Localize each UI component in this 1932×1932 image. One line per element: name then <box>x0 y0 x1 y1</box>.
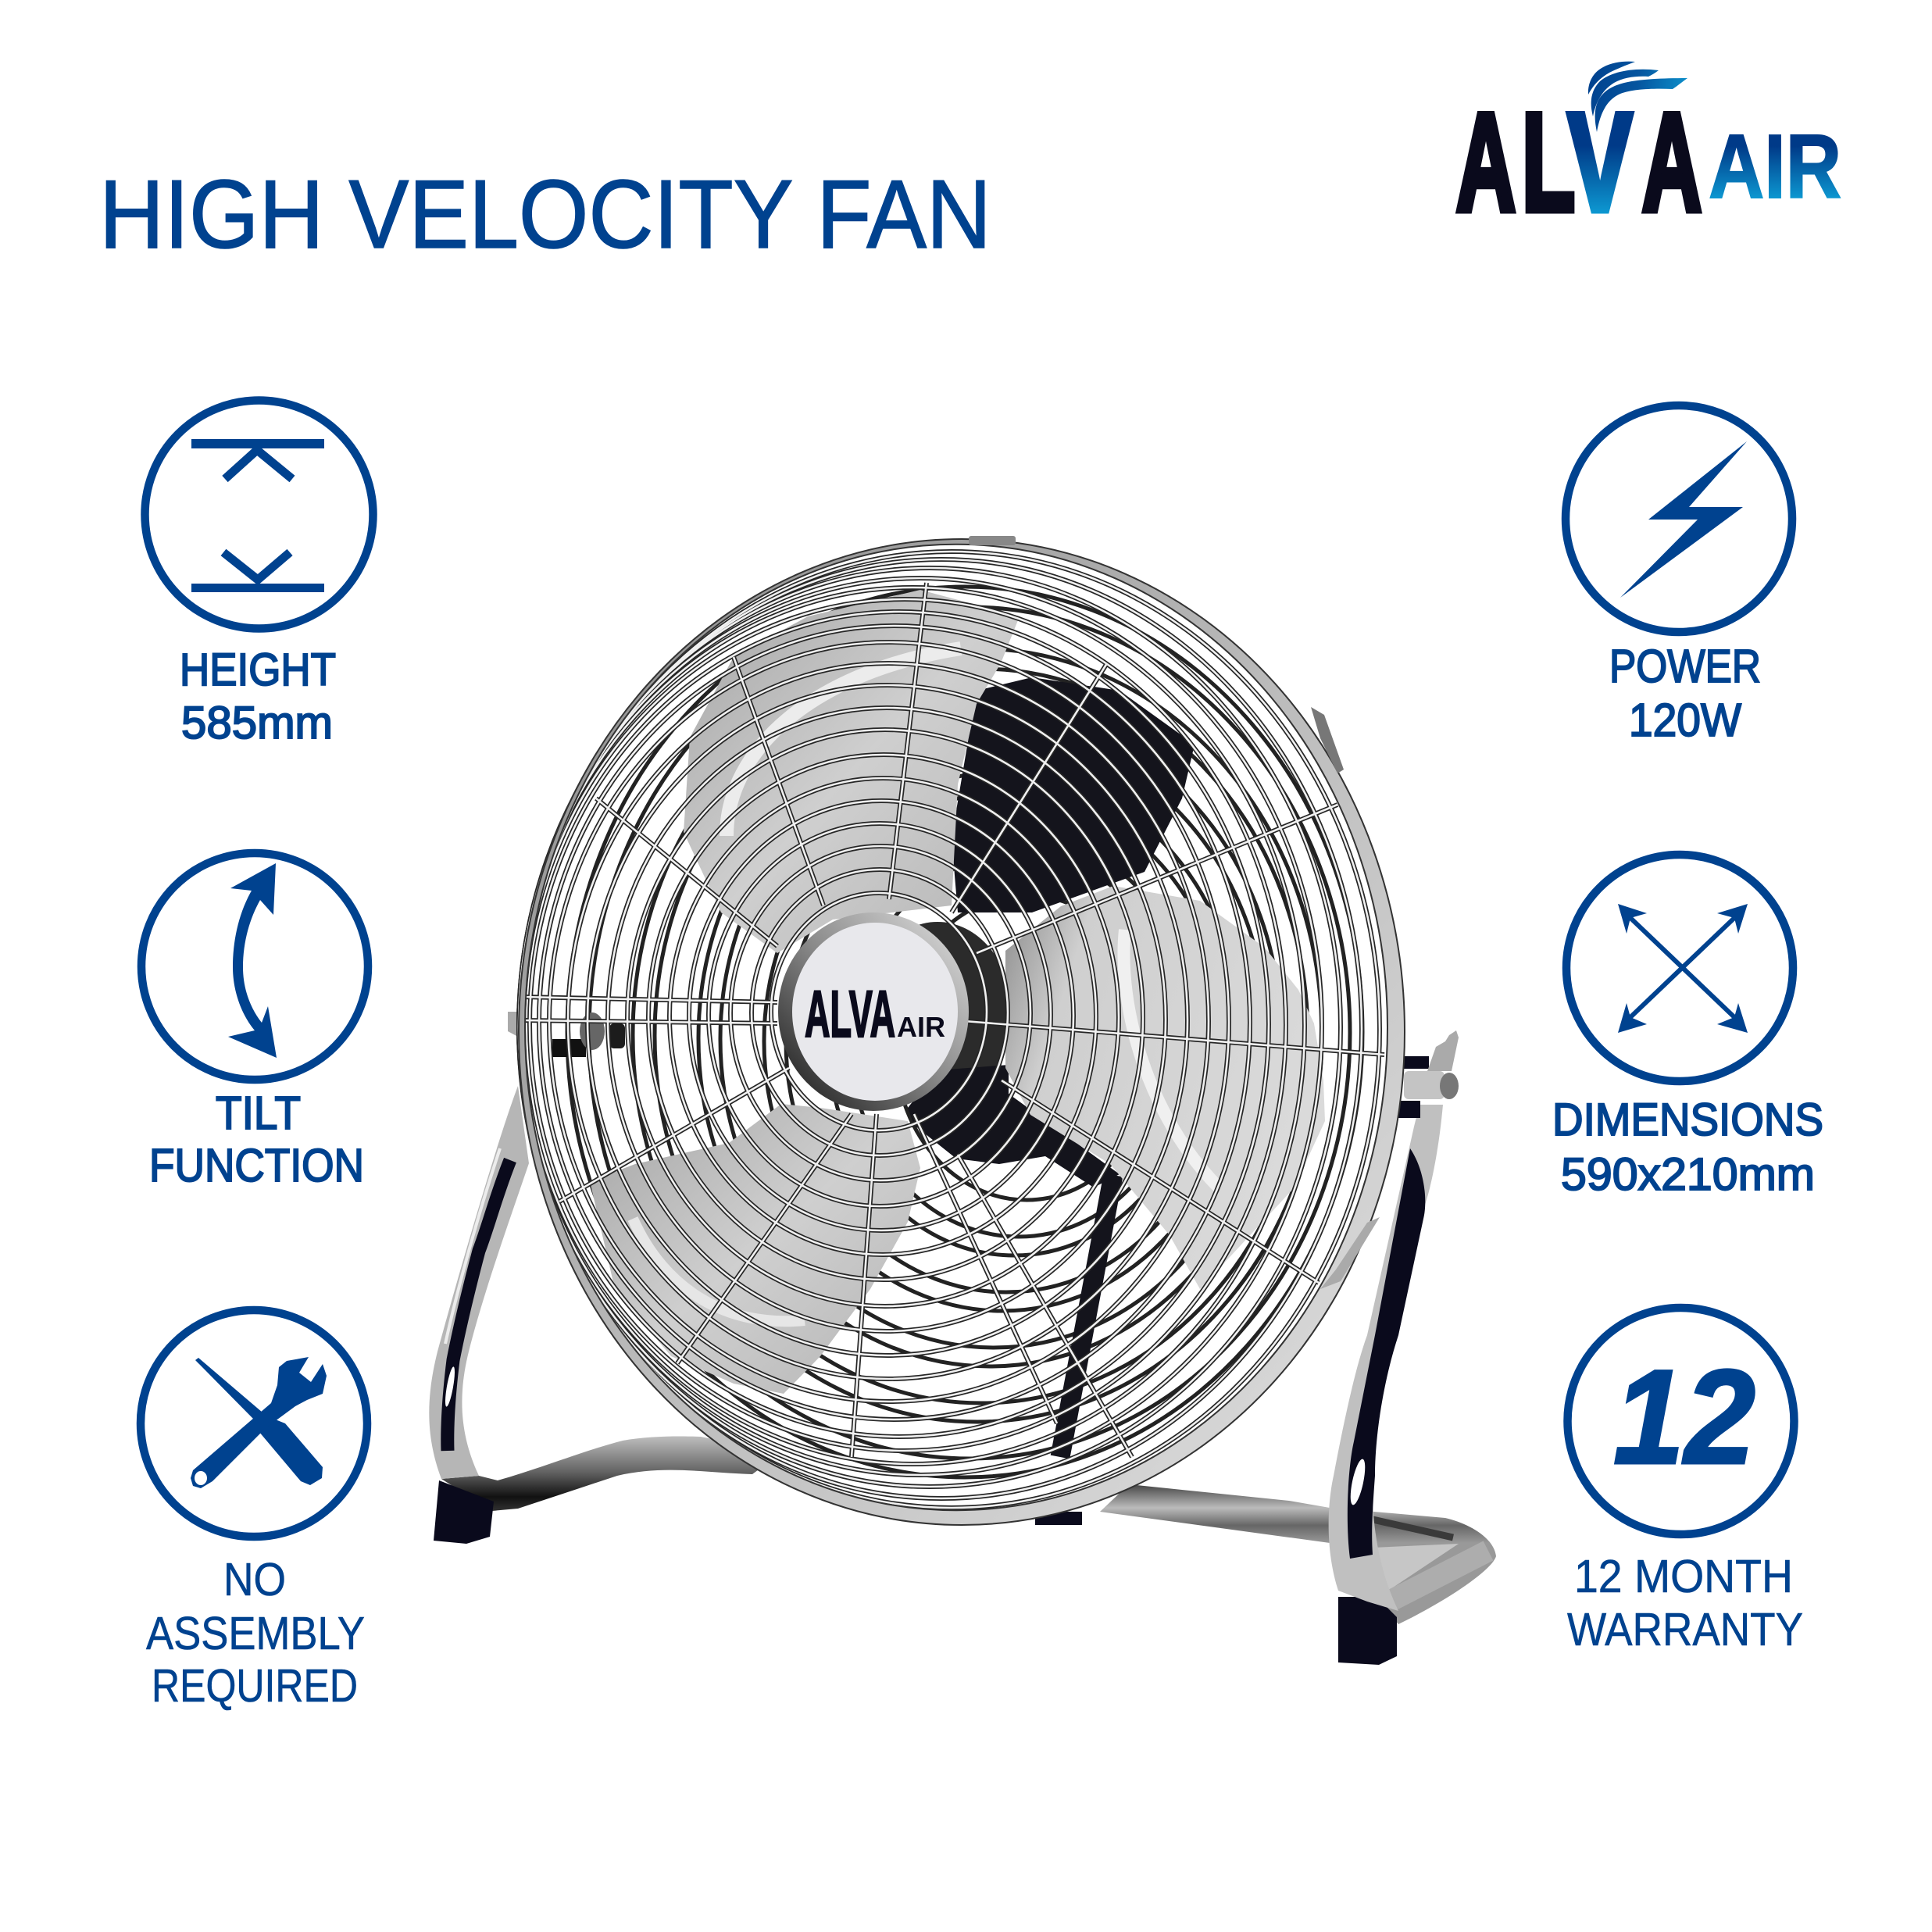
rear grille <box>567 587 1362 1477</box>
support strut <box>1060 1175 1113 1457</box>
label: no assembly required: ASSEMBLY <box>146 1608 365 1659</box>
label: power: 120W <box>1629 695 1741 746</box>
cage interior background <box>525 545 1387 1510</box>
logo feathers <box>1588 62 1687 132</box>
rim clip lower right <box>1320 1217 1380 1289</box>
left leg <box>429 1086 529 1479</box>
icon: 12 badge: 12 <box>1613 1342 1755 1492</box>
motor housing <box>952 677 1195 912</box>
logo wordmark ALVA <box>1456 84 1702 240</box>
hub backing <box>863 922 1012 1102</box>
right foot <box>1338 1597 1397 1665</box>
rim clip right <box>1311 707 1344 773</box>
hub logo: AIR <box>897 1011 945 1043</box>
right leg <box>1329 1105 1443 1611</box>
rim clip top <box>969 536 1016 545</box>
label: dimensions: 590x210mm <box>1561 1149 1815 1200</box>
base inner gap <box>1373 1544 1459 1591</box>
front grille <box>519 552 1384 1508</box>
panel: warranty <box>1567 1308 1803 1655</box>
label: no assembly required: REQUIRED <box>152 1660 358 1712</box>
panel: dimensions <box>1552 855 1823 1200</box>
hub logo: ALVA <box>805 977 895 1051</box>
left base tube <box>441 1437 781 1511</box>
label: 12 month warranty: WARRANTY <box>1567 1604 1803 1655</box>
logo wordmark ALVA: L <box>1522 84 1575 240</box>
panel: height <box>145 400 373 748</box>
panel: no assembly <box>141 1310 367 1712</box>
fan product image <box>429 536 1496 1665</box>
label: no assembly required: NO <box>223 1554 286 1605</box>
logo wordmark ALVA: A <box>1456 84 1516 240</box>
rear foot <box>1035 1512 1082 1525</box>
icon: crossed tools <box>141 1310 367 1537</box>
label: height: 585mm <box>181 698 333 748</box>
base dark streak <box>1373 1520 1453 1537</box>
label: height: HEIGHT <box>180 645 336 695</box>
label: tilt function: TILT <box>216 1087 301 1139</box>
left knob and bolt <box>552 1012 625 1057</box>
icon: 12 badge <box>1567 1308 1794 1534</box>
left foot <box>434 1480 494 1544</box>
label: tilt function: FUNCTION <box>149 1140 364 1191</box>
right base tube <box>1100 1484 1496 1624</box>
label: 12 month warranty: 12 MONTH <box>1574 1551 1793 1602</box>
rim <box>519 539 1405 1525</box>
label: power: POWER <box>1609 641 1761 692</box>
blade: bottom left <box>590 1104 920 1394</box>
icon: height <box>145 400 373 628</box>
label: dimensions: DIMENSIONS <box>1552 1095 1823 1145</box>
left pivot bracket <box>508 1012 518 1037</box>
logo wordmark ALVA: A <box>1642 84 1702 240</box>
blade: right <box>1005 886 1325 1289</box>
logo: Alva Air <box>1456 62 1841 240</box>
icon: tilt arrows <box>141 853 368 1080</box>
lower motor shadow <box>908 1065 1120 1187</box>
icon: diagonal arrows <box>1566 855 1793 1081</box>
base near tube <box>1392 1551 1488 1600</box>
blade: top left <box>684 590 1020 953</box>
hub chrome ring <box>778 912 969 1111</box>
hub plate <box>792 923 958 1101</box>
panel: power <box>1566 405 1792 746</box>
logo wordmark ALVA: V <box>1568 84 1632 240</box>
icon: lightning bolt <box>1566 405 1792 632</box>
panel: tilt <box>141 853 368 1191</box>
right pivot bracket <box>1397 1030 1459 1118</box>
logo wordmark AIR: AIR <box>1709 116 1841 217</box>
title: HIGH VELOCITY FAN <box>99 161 991 269</box>
